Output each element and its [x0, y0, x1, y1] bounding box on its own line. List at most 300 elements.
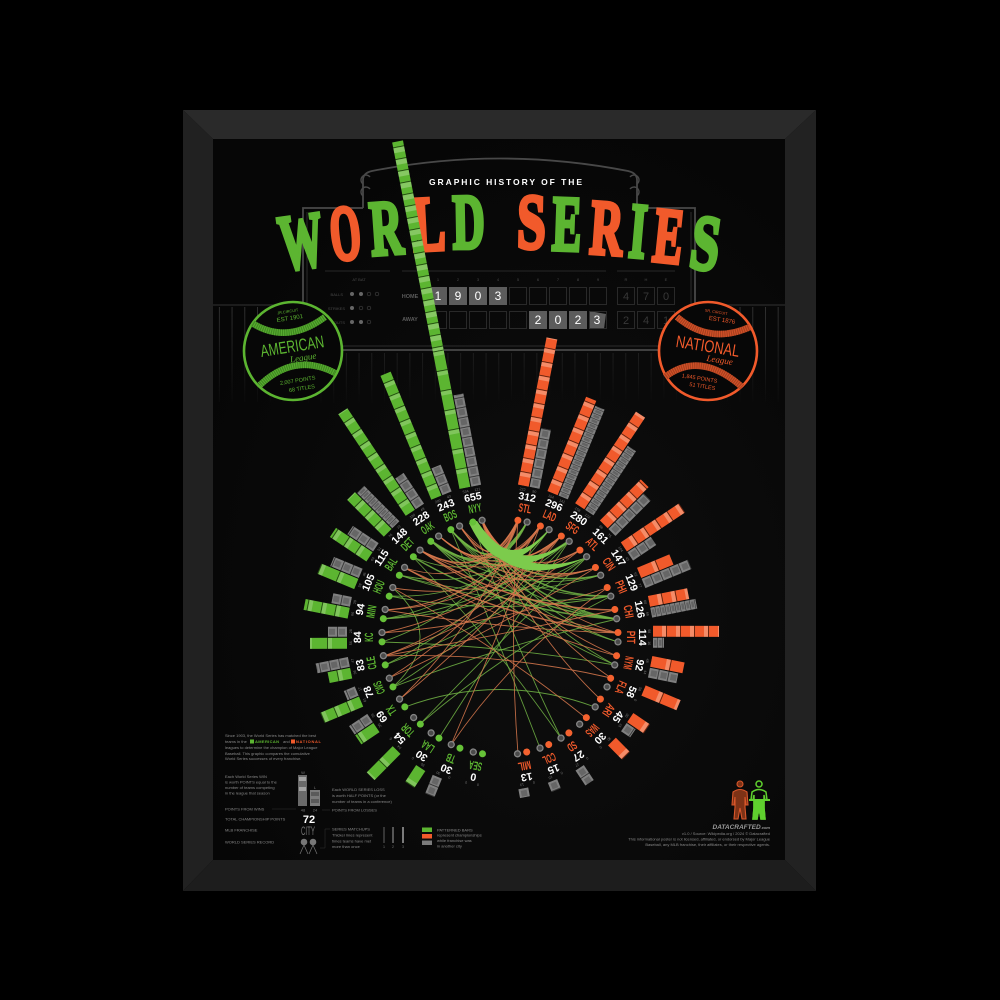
home row: 3: [495, 289, 502, 303]
labels: 180: [409, 513, 416, 520]
series matchups: 2: [392, 845, 394, 849]
labels: 15: [617, 723, 623, 728]
team: MIL: [511, 748, 538, 798]
labels: [350, 654, 380, 675]
labels: 86: [598, 524, 604, 530]
badge: national league baseball: SR. CIRCUIT: [705, 309, 728, 316]
bars: [367, 746, 401, 780]
nodes: [395, 695, 410, 712]
labels: 0: [532, 780, 535, 784]
labels: 27: [574, 762, 580, 767]
team: BAL: [330, 519, 411, 583]
patterned bars key: represent championships: [437, 832, 482, 838]
team: SD: [554, 728, 601, 786]
nodes: [427, 728, 444, 743]
points from wins: POINTS FROM WINS: [225, 806, 265, 812]
nodes: [469, 516, 486, 526]
labels: 0: [465, 780, 468, 784]
intro text: and: [283, 739, 290, 744]
labels: 16: [647, 641, 651, 645]
outfield fence: [213, 305, 785, 403]
labels: PIT: [624, 631, 638, 644]
team: NYY: [392, 138, 488, 527]
total points: TOTAL CHAMPIONSHIP POINTS: [225, 816, 286, 822]
labels: 105: [360, 572, 378, 593]
poster background: [213, 139, 785, 860]
labels: 39: [370, 713, 376, 718]
labels: ATL: [583, 535, 602, 554]
labels: 0: [448, 775, 451, 780]
franchise: CITY: [301, 824, 315, 838]
labels: [370, 546, 402, 575]
nodes: [614, 629, 622, 645]
world series record: WORLD SERIES RECORD: [225, 840, 274, 844]
nodes: [591, 694, 605, 711]
nodes: [575, 713, 591, 729]
subtitle: GRAPHIC HISTORY OF THE: [429, 177, 582, 187]
credits: [628, 824, 771, 847]
icon: orange ballplayer: [732, 781, 748, 819]
series matchups: 3: [402, 845, 404, 849]
bars: [347, 484, 399, 537]
inning numbers: [437, 277, 668, 282]
inning numbers: 2: [457, 277, 460, 282]
labels: 122: [584, 513, 591, 520]
badge: national league baseball: 1,845 POINTS: [681, 373, 718, 385]
labels: 98: [647, 629, 651, 633]
labels: MIN: [363, 604, 380, 619]
team: MIN: [304, 588, 390, 626]
labels: LAA: [418, 737, 437, 756]
away row: 2: [535, 313, 542, 327]
labels: BAL: [382, 555, 401, 573]
total points: 72: [303, 814, 315, 826]
team: KC: [310, 627, 386, 649]
labels: 60: [643, 600, 647, 605]
labels: 46: [362, 572, 367, 577]
badge: american league baseball: 2,007 POINTS: [280, 375, 316, 387]
team: COL: [533, 740, 569, 792]
labels: [562, 737, 589, 767]
nodes: [378, 629, 386, 645]
labels: 142: [559, 498, 566, 504]
franchise: [225, 824, 315, 838]
example bars: [298, 770, 320, 812]
world series letters: O: [326, 189, 365, 278]
team: STL: [511, 337, 568, 527]
labels: 54: [397, 744, 402, 750]
team: ARI: [589, 691, 650, 742]
labels: NYM: [620, 655, 637, 671]
badge: american league baseball: EST 1901: [276, 314, 304, 324]
bars: [600, 479, 656, 536]
bars: [518, 337, 568, 489]
labels: LAD: [541, 507, 559, 525]
chords: american league wins: [382, 522, 618, 748]
home row: 4: [623, 291, 629, 303]
team: CWS: [316, 671, 399, 723]
labels: 0: [469, 770, 477, 783]
away row: [402, 311, 674, 329]
labels: [409, 506, 439, 539]
away row: 3: [594, 313, 601, 327]
labels: 15: [548, 775, 553, 780]
nodes: [409, 713, 425, 729]
team: WAS: [575, 710, 630, 765]
labels: 43: [624, 556, 630, 562]
nodes: [603, 583, 615, 600]
labels: [436, 749, 460, 780]
labels: [598, 546, 630, 575]
bars: [425, 775, 442, 797]
labels: 75: [607, 533, 612, 539]
team: CLE: [316, 649, 390, 685]
labels: [581, 524, 613, 555]
labels: 222: [519, 487, 526, 492]
labels: 228: [411, 509, 432, 529]
labels: 0: [633, 698, 637, 702]
labels: [411, 737, 438, 767]
home row: 1: [435, 289, 442, 303]
labels: 115: [372, 548, 392, 568]
loss explanation: [322, 787, 392, 812]
bars: [641, 685, 681, 710]
series matchups: times teams have met: [332, 838, 372, 844]
home row: 0: [475, 289, 482, 303]
labels: 296: [543, 497, 564, 515]
nodes: [379, 606, 389, 623]
labels: WAS: [583, 721, 602, 740]
labels: 58: [637, 686, 642, 692]
inning numbers: 1: [437, 277, 440, 282]
inning numbers: 5: [517, 277, 520, 282]
labels: [582, 720, 612, 749]
world series letters: D: [452, 178, 485, 265]
labels: SEA: [468, 758, 483, 774]
labels: [539, 494, 566, 526]
intro text: teams in the: [225, 739, 248, 744]
team: ATL: [573, 479, 656, 563]
labels: 0: [598, 745, 603, 749]
labels: 30: [436, 770, 441, 775]
labels: 30: [624, 713, 630, 718]
labels: 52: [633, 572, 638, 577]
wins explanation: in the league that season: [225, 790, 270, 796]
home row: HOME: [402, 294, 419, 300]
intro text: World Series successes of every franchise.: [225, 756, 301, 761]
labels: [370, 700, 402, 728]
bars: [317, 553, 363, 589]
bars: [392, 138, 481, 489]
bars: [548, 779, 561, 792]
badge: american league baseball: 68 TITLES: [289, 384, 316, 394]
nodes: [385, 674, 398, 691]
labels: 27: [570, 747, 586, 764]
team: CIN: [589, 503, 691, 582]
inning numbers: 4: [497, 277, 500, 282]
away row: 4: [643, 315, 649, 327]
bars: [330, 519, 379, 561]
labels: 77: [637, 583, 643, 588]
wins explanation: number of teams competing: [225, 785, 275, 790]
badge: national league baseball: NATIONAL: [675, 332, 741, 361]
wins explanation: is worth POINTS equal to the: [225, 780, 278, 784]
world series letters: E: [551, 180, 583, 268]
badge: national league baseball: [659, 302, 757, 400]
bars: [648, 656, 685, 684]
labels: [561, 506, 591, 539]
team: TB: [425, 739, 465, 800]
labels: 126: [632, 600, 647, 619]
labels: 200: [434, 498, 441, 504]
bars: [637, 549, 692, 588]
labels: 30: [439, 761, 454, 776]
team: TX: [349, 692, 412, 744]
badge: american league baseball: JR.CIRCUIT: [277, 308, 299, 315]
chord diagram: series matchups: [382, 520, 618, 754]
labels: 51: [377, 546, 382, 552]
loss explanation: is worth HALF POINTS (or the: [332, 793, 387, 798]
at bat panel: STRIKES: [328, 306, 345, 311]
labels: CWS: [370, 679, 388, 696]
world series letters: S: [516, 179, 547, 266]
bars: [304, 588, 352, 619]
points from wins: [225, 806, 296, 812]
labels: 148: [389, 526, 410, 547]
scoreboard: [303, 158, 695, 350]
labels: 44: [643, 670, 647, 675]
labels: TX: [383, 703, 400, 718]
nodes: [591, 563, 605, 580]
bars: [316, 657, 352, 685]
labels: 84: [352, 631, 364, 643]
labels: 28: [353, 600, 357, 605]
labels: COL: [541, 749, 558, 767]
labels: 13: [520, 782, 524, 787]
labels: CIN: [599, 555, 618, 573]
labels: [350, 600, 380, 621]
labels: 312: [517, 490, 537, 505]
team: BOS: [380, 367, 466, 535]
loss explanation: POINTS FROM LOSSES: [332, 808, 377, 812]
labels: 114: [636, 629, 648, 646]
team: LAA: [398, 728, 447, 788]
nodes: [575, 545, 591, 561]
labels: 534: [462, 489, 469, 494]
bars: [380, 367, 452, 500]
badge: national league baseball: EST 1876: [708, 316, 736, 326]
labels: 58: [623, 684, 639, 700]
wins explanation: Each World Series WIN: [225, 774, 267, 779]
labels: STL: [517, 500, 533, 517]
labels: [620, 599, 650, 622]
world series letters: [274, 178, 726, 289]
at bat panel: BALLS: [331, 292, 343, 297]
example bars: L: [314, 785, 317, 790]
team: SFG: [554, 412, 654, 547]
labels: [349, 629, 376, 645]
intro text: Since 1903, the World Series has matched the best: [225, 733, 317, 738]
labels: 66: [350, 612, 355, 616]
team: PIT: [614, 626, 719, 648]
series matchups: 1: [383, 845, 385, 849]
example bars: W: [301, 770, 305, 775]
labels: 61: [362, 697, 367, 703]
labels: DET: [398, 534, 417, 554]
series matchups: [320, 826, 404, 849]
labels: ARI: [599, 701, 618, 720]
series matchups: Thicker lines represent: [332, 832, 373, 838]
nodes: [611, 605, 621, 622]
inning numbers: 8: [577, 277, 580, 282]
labels: 45: [609, 708, 626, 725]
nodes: [557, 728, 574, 743]
labels: MIL: [517, 758, 532, 774]
world series letters: I: [626, 187, 650, 275]
labels: 56: [349, 641, 353, 645]
bars: [621, 503, 691, 561]
labels: 158: [574, 506, 581, 513]
labels: NYY: [467, 500, 483, 517]
patterned bars key: [422, 828, 482, 848]
labels: 0: [560, 771, 563, 775]
labels: [624, 629, 651, 646]
labels: 92: [632, 658, 646, 672]
labels: 17: [358, 686, 363, 692]
labels: 48: [645, 658, 650, 663]
nodes: [603, 674, 615, 691]
labels: [357, 571, 389, 598]
inning numbers: E: [665, 277, 668, 282]
labels: [358, 677, 389, 703]
nodes: [447, 740, 465, 753]
labels: 30: [414, 747, 430, 764]
labels: 78: [361, 684, 377, 700]
away row: AWAY: [402, 317, 418, 323]
labels: 147: [608, 547, 628, 569]
world series record: [225, 839, 317, 854]
labels: 48: [420, 507, 425, 512]
chords: tapered yankees bundles: [469, 521, 587, 571]
team: LAD: [533, 397, 606, 535]
labels: [434, 494, 461, 526]
scroll ornaments: [361, 175, 639, 196]
bars: [575, 765, 594, 786]
labels: 243: [436, 497, 457, 514]
labels: 13: [520, 769, 533, 784]
loss explanation: number of teams in a conference): [332, 799, 392, 804]
labels: [465, 757, 484, 787]
picture frame: [183, 110, 816, 891]
labels: CHI: [620, 604, 637, 619]
labels: 121: [474, 487, 481, 492]
badge: american league baseball: [244, 302, 342, 400]
labels: 76: [388, 533, 393, 539]
inning numbers: 6: [537, 277, 540, 282]
inning numbers: H: [645, 277, 648, 282]
world series letters: S: [685, 199, 726, 289]
inning numbers: 7: [557, 277, 560, 282]
wins explanation: [225, 774, 278, 796]
nodes: [557, 531, 574, 546]
labels: 129: [622, 572, 640, 593]
franchise: MLB FRANCHISE: [225, 828, 258, 832]
example bars: 48: [301, 808, 306, 812]
bars: [405, 765, 425, 788]
labels: 90: [532, 490, 537, 494]
labels: 280: [568, 509, 589, 529]
team: DET: [347, 484, 427, 564]
team: PHI: [601, 549, 692, 603]
bars: [648, 587, 697, 618]
inning numbers: R: [625, 277, 628, 282]
nodes: [470, 748, 487, 758]
labels: 30: [606, 736, 612, 742]
labels: 30: [377, 723, 383, 728]
labels: 0: [389, 737, 393, 741]
labels: [462, 487, 485, 517]
inning numbers: 9: [597, 277, 600, 282]
intro text: leagues to determine the champion of Major League: [225, 745, 318, 750]
away row: 0: [555, 313, 562, 327]
bars: [338, 402, 424, 516]
icon: green ballplayer: [749, 781, 770, 819]
badge: american league baseball: AMERICAN: [259, 332, 325, 361]
team: HOU: [317, 553, 398, 604]
bars: [547, 397, 606, 499]
labels: FLA: [612, 679, 630, 696]
bars: [349, 714, 380, 744]
bars: [621, 713, 650, 742]
nodes: [514, 748, 531, 758]
labels: [539, 749, 563, 780]
badge: national league baseball: 51 TITLES: [689, 382, 716, 392]
labels: 0: [585, 756, 589, 760]
labels: 104: [617, 546, 624, 553]
labels: 30: [591, 730, 608, 746]
nodes: [394, 563, 409, 580]
nodes: [611, 652, 621, 669]
labels: 28: [349, 629, 353, 633]
labels: 66: [645, 612, 650, 616]
team: FLA: [603, 671, 681, 718]
labels: 54: [392, 729, 408, 746]
labels: [598, 700, 630, 728]
bars: [653, 626, 719, 648]
nodes: [426, 532, 443, 546]
labels: 30: [420, 762, 426, 767]
at bat panel: [325, 271, 675, 325]
labels: 59: [357, 583, 363, 588]
labels: 83: [354, 658, 368, 672]
nodes: [385, 583, 397, 601]
labels: [515, 487, 538, 517]
team: SEA: [464, 748, 487, 787]
intro text: AMERICAN: [255, 739, 279, 744]
badge: american league baseball: League: [288, 350, 317, 365]
home row: [402, 287, 674, 305]
labels: TOR: [398, 720, 417, 740]
nodes: [536, 521, 553, 534]
chords: national league wins: [382, 520, 618, 754]
labels: [611, 571, 643, 598]
scoreboard outline: [303, 158, 695, 350]
patterned bars key: in another city: [437, 844, 462, 848]
patterned bars key: while franchise was: [437, 838, 472, 843]
labels: OAK: [418, 518, 437, 537]
labels: HOU: [370, 578, 388, 596]
legend: how to read: [225, 770, 482, 854]
